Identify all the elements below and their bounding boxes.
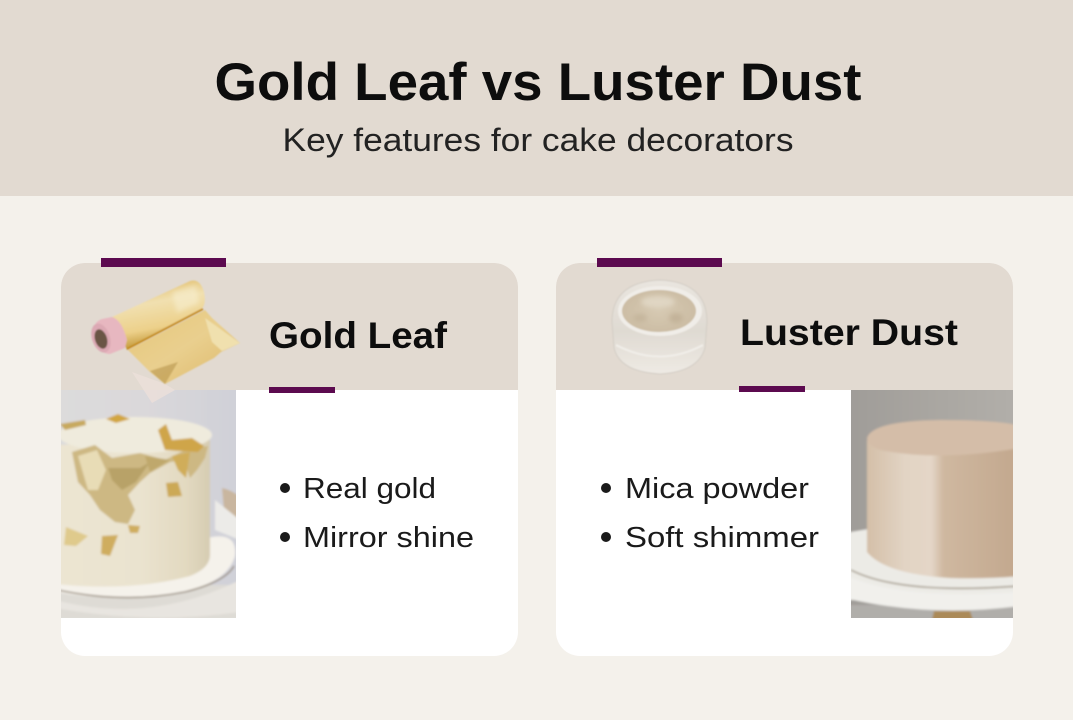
icon: luster dust jar (612, 280, 707, 374)
panel: gold leaf (55, 258, 518, 656)
icon: gold leaf roll (88, 280, 240, 403)
panel heading: Gold Leaf (269, 315, 448, 356)
panel body (61, 263, 518, 656)
bullet list: Soft shimmer (625, 522, 819, 554)
photo: cake with gold leaf (55, 385, 240, 620)
panel body (556, 263, 1013, 656)
subtitle: Key features for cake decorators (282, 122, 794, 158)
bullet list: Real gold (303, 473, 436, 505)
panel: luster dust (556, 258, 1020, 656)
top accent bar (597, 258, 722, 267)
bullet list (601, 473, 819, 554)
panel heading: Luster Dust (740, 312, 958, 353)
header band (0, 0, 1073, 196)
title: Gold Leaf vs Luster Dust (214, 53, 862, 112)
panel header (556, 263, 1013, 390)
heading underline (269, 387, 335, 393)
bullet list: Mica powder (625, 473, 809, 505)
heading underline (739, 386, 805, 392)
photo: cake with luster dust (851, 390, 1013, 618)
bullet list: Mirror shine (303, 522, 474, 554)
top accent bar (101, 258, 226, 267)
bullet list (280, 473, 474, 554)
panel header (61, 263, 518, 390)
